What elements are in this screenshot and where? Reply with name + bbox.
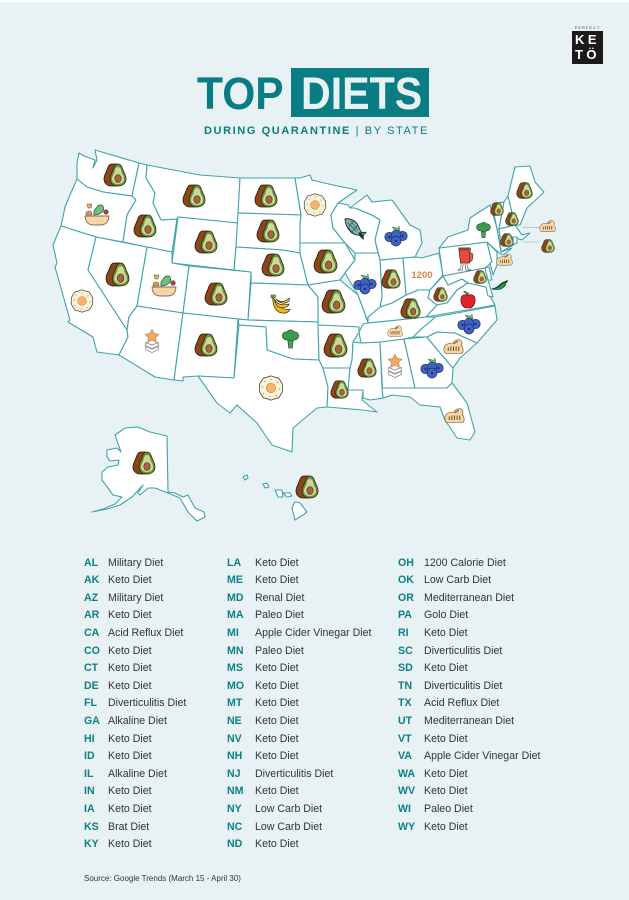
icon: MN donut	[304, 194, 326, 216]
text: OH	[398, 556, 414, 568]
icon: OH 1200 text: 1200	[411, 270, 433, 281]
icon: SD avocado	[257, 220, 279, 242]
text: MI	[227, 627, 239, 639]
icon: MT avocado	[183, 185, 205, 207]
icon: RI avocado	[542, 240, 554, 252]
text: Low Carb Diet	[255, 803, 322, 815]
text: DE	[84, 680, 99, 692]
text: Apple Cider Vinegar Diet	[255, 627, 371, 639]
text: Keto Diet	[255, 715, 299, 727]
icon: AZ star stack	[145, 329, 159, 353]
text: MT	[227, 697, 242, 709]
AK	[92, 427, 205, 521]
icon: DE avocado	[474, 271, 486, 283]
text: Keto Diet	[255, 750, 299, 762]
text: NJ	[227, 768, 241, 780]
MS	[348, 342, 383, 400]
icon: CO avocado	[205, 283, 227, 305]
icon: ND avocado	[255, 185, 277, 207]
SC	[427, 332, 477, 368]
KY	[368, 290, 437, 323]
text: IL	[84, 768, 93, 780]
text: WY	[398, 821, 415, 833]
text: NY	[227, 803, 242, 815]
text: Keto Diet	[108, 803, 152, 815]
text: Diverticulitis Diet	[424, 680, 502, 692]
text: Paleo Diet	[255, 645, 304, 657]
text: Keto Diet	[424, 821, 468, 833]
icon: NJ bread	[497, 254, 512, 265]
icon: WY avocado	[195, 231, 217, 253]
icon: MO avocado	[322, 290, 345, 313]
text: ID	[84, 750, 95, 762]
WI	[331, 203, 380, 253]
text: Military Diet	[108, 556, 163, 568]
text: GA	[84, 715, 100, 727]
text: ND	[227, 838, 242, 850]
AL	[380, 339, 415, 398]
text: AZ	[84, 592, 98, 604]
text: Keto Diet	[108, 574, 152, 586]
text: FL	[84, 697, 97, 709]
text: Diverticulitis Diet	[108, 697, 186, 709]
text: Keto Diet	[255, 785, 299, 797]
VT	[492, 202, 504, 229]
IN	[380, 258, 406, 307]
NJ	[487, 242, 497, 275]
icon: MS avocado	[358, 359, 376, 377]
legend column 3	[398, 556, 540, 833]
FL	[382, 383, 475, 440]
icon: UT salad	[152, 275, 176, 296]
text: 1200 Calorie Diet	[424, 556, 506, 568]
icon: ID avocado	[134, 215, 156, 237]
text: Paleo Diet	[424, 803, 473, 815]
text: SC	[398, 645, 413, 657]
text: Military Diet	[108, 592, 163, 604]
text: Paleo Diet	[255, 609, 304, 621]
text: Keto Diet	[424, 785, 468, 797]
text: TN	[398, 680, 412, 692]
MT	[146, 165, 240, 223]
icon: NE avocado	[262, 254, 284, 276]
text: HI	[84, 733, 95, 745]
text: Low Carb Diet	[255, 821, 322, 833]
text: Diverticulitis Diet	[424, 645, 502, 657]
text: IA	[84, 803, 95, 815]
icon: MI blueberries	[385, 226, 407, 246]
source note: Source: Google Trends (March 15 - April 30)	[84, 874, 241, 882]
NV	[88, 237, 147, 330]
LA	[323, 368, 377, 412]
text: Keto Diet	[108, 838, 152, 850]
HI	[243, 475, 307, 520]
IL	[345, 253, 382, 322]
icon: OR salad	[85, 204, 109, 225]
text: Renal Diet	[255, 592, 304, 604]
RI	[513, 237, 517, 245]
text: WI	[398, 803, 411, 815]
icon: GA blueberries	[421, 358, 443, 378]
text: MA	[227, 609, 243, 621]
CT	[500, 237, 513, 252]
icon: KS banana	[271, 295, 290, 313]
text: Keto Diet	[424, 768, 468, 780]
text: KS	[84, 821, 99, 833]
text: Keto Diet	[424, 733, 468, 745]
text: Acid Reflux Diet	[108, 627, 183, 639]
subtitle: DURING QUARANTINE | BY STATE	[204, 125, 429, 137]
state shapes	[53, 150, 544, 521]
KS	[248, 283, 318, 322]
text: Keto Diet	[255, 680, 299, 692]
text: IN	[84, 785, 95, 797]
icon: FL bread	[445, 409, 464, 422]
text: CO	[84, 645, 100, 657]
text: Diverticulitis Diet	[255, 768, 333, 780]
text: MO	[227, 680, 244, 692]
NH	[499, 196, 515, 229]
PA	[439, 242, 492, 276]
icon: WA avocado	[104, 164, 126, 186]
logo: Perfect Keto: TÖ	[575, 46, 600, 62]
icon: TX donut	[259, 376, 283, 400]
text: LA	[227, 556, 241, 568]
text: WV	[398, 785, 415, 797]
text: NE	[227, 715, 242, 727]
icon: MA bread	[540, 220, 555, 232]
icon: PA red mug	[458, 248, 473, 270]
text: Brat Diet	[108, 821, 149, 833]
text: Apple Cider Vinegar Diet	[424, 750, 540, 762]
icon: HI avocado	[296, 476, 318, 498]
icon: NH avocado	[506, 213, 518, 225]
text: Low Carb Diet	[424, 574, 491, 586]
icon: VA apple	[461, 291, 475, 308]
ID	[123, 163, 177, 252]
IA	[300, 243, 355, 285]
SD	[236, 213, 301, 253]
icon: ME avocado	[517, 183, 532, 198]
icon: NV avocado	[106, 263, 129, 286]
text: Mediterranean Diet	[424, 592, 514, 604]
text: RI	[398, 627, 409, 639]
logo: Perfect Keto: KE	[575, 32, 600, 47]
MI	[350, 195, 422, 260]
AZ	[119, 306, 183, 380]
ND	[238, 178, 301, 215]
MN	[295, 175, 357, 243]
icons	[71, 164, 555, 498]
text: WA	[398, 768, 415, 780]
text: KY	[84, 838, 99, 850]
text: Alkaline Diet	[108, 768, 167, 780]
OR	[61, 179, 136, 242]
UT	[137, 247, 189, 313]
text: Keto Diet	[255, 574, 299, 586]
TX	[198, 325, 328, 452]
VA	[426, 283, 495, 317]
icon: KY avocado	[401, 299, 420, 318]
text: Golo Diet	[424, 609, 468, 621]
icon: MD chili	[492, 281, 507, 290]
logo: Perfect Keto: PERFECT	[575, 25, 600, 30]
WY	[172, 217, 238, 270]
text: VT	[398, 733, 412, 745]
text: AK	[84, 574, 99, 586]
text: Keto Diet	[255, 662, 299, 674]
NM	[174, 313, 238, 381]
icon: IL blueberries	[354, 274, 376, 294]
icon: SC bread	[444, 340, 463, 354]
NY	[439, 205, 512, 255]
icon: NC blueberries	[458, 314, 480, 334]
title: DIETS	[301, 68, 422, 119]
icon: TN bread	[388, 326, 402, 336]
text: OR	[398, 592, 414, 604]
text: NH	[227, 750, 242, 762]
text: ME	[227, 574, 243, 586]
text: Keto Diet	[424, 662, 468, 674]
text: NC	[227, 821, 242, 833]
text: PA	[398, 609, 412, 621]
text: CA	[84, 627, 99, 639]
OH	[403, 253, 443, 295]
text: AL	[84, 556, 98, 568]
ME	[508, 166, 544, 225]
text: NM	[227, 785, 243, 797]
title	[197, 68, 429, 119]
icon: LA avocado	[331, 381, 348, 398]
icon: NM avocado	[195, 334, 217, 356]
text: Keto Diet	[108, 662, 152, 674]
GA	[404, 337, 453, 388]
text: Keto Diet	[255, 556, 299, 568]
text: MD	[227, 592, 243, 604]
MO	[308, 280, 368, 333]
NC	[413, 306, 497, 343]
text: Mediterranean Diet	[424, 715, 514, 727]
title: TOP	[197, 68, 284, 119]
text: Keto Diet	[255, 838, 299, 850]
text: TX	[398, 697, 412, 709]
WA	[77, 150, 139, 196]
text: SD	[398, 662, 413, 674]
legend column 1	[84, 556, 186, 850]
WV	[428, 276, 468, 305]
icon: WV avocado	[434, 288, 447, 301]
text: Keto Diet	[108, 733, 152, 745]
text: NV	[227, 733, 242, 745]
text: OK	[398, 574, 414, 586]
MA	[499, 225, 530, 240]
text: VA	[398, 750, 412, 762]
text: Keto Diet	[424, 627, 468, 639]
icon: IA avocado	[314, 250, 337, 273]
DE	[485, 267, 492, 280]
text: Keto Diet	[108, 750, 152, 762]
text: Keto Diet	[255, 733, 299, 745]
text: UT	[398, 715, 412, 727]
text: AR	[84, 609, 99, 621]
text: Keto Diet	[255, 697, 299, 709]
text: Keto Diet	[108, 680, 152, 692]
NE	[234, 247, 308, 285]
TN	[359, 317, 435, 343]
icon: CA donut	[71, 290, 93, 312]
text: MS	[227, 662, 243, 674]
text: Acid Reflux Diet	[424, 697, 499, 709]
icon: VT avocado	[491, 203, 503, 215]
text: CT	[84, 662, 98, 674]
text: Keto Diet	[108, 609, 152, 621]
icon: OK broccoli	[282, 330, 299, 348]
icon: NY broccoli	[477, 222, 490, 238]
text: Alkaline Diet	[108, 715, 167, 727]
text: MN	[227, 645, 243, 657]
icon: WI fish	[345, 219, 366, 239]
legend column 2	[227, 556, 372, 850]
logo: Perfect Keto	[572, 25, 603, 64]
MD	[443, 268, 493, 297]
text: Keto Diet	[108, 785, 152, 797]
icon: CT avocado	[501, 234, 513, 246]
CO	[183, 266, 251, 320]
text: Keto Diet	[108, 645, 152, 657]
OK	[238, 319, 319, 360]
leader lines	[523, 228, 539, 242]
AR	[318, 325, 359, 368]
CA	[53, 226, 128, 355]
icon: AL star stack	[388, 354, 402, 378]
icon: IN avocado	[382, 270, 400, 288]
icon: AR avocado	[324, 334, 347, 357]
icon: AK avocado	[133, 452, 155, 474]
